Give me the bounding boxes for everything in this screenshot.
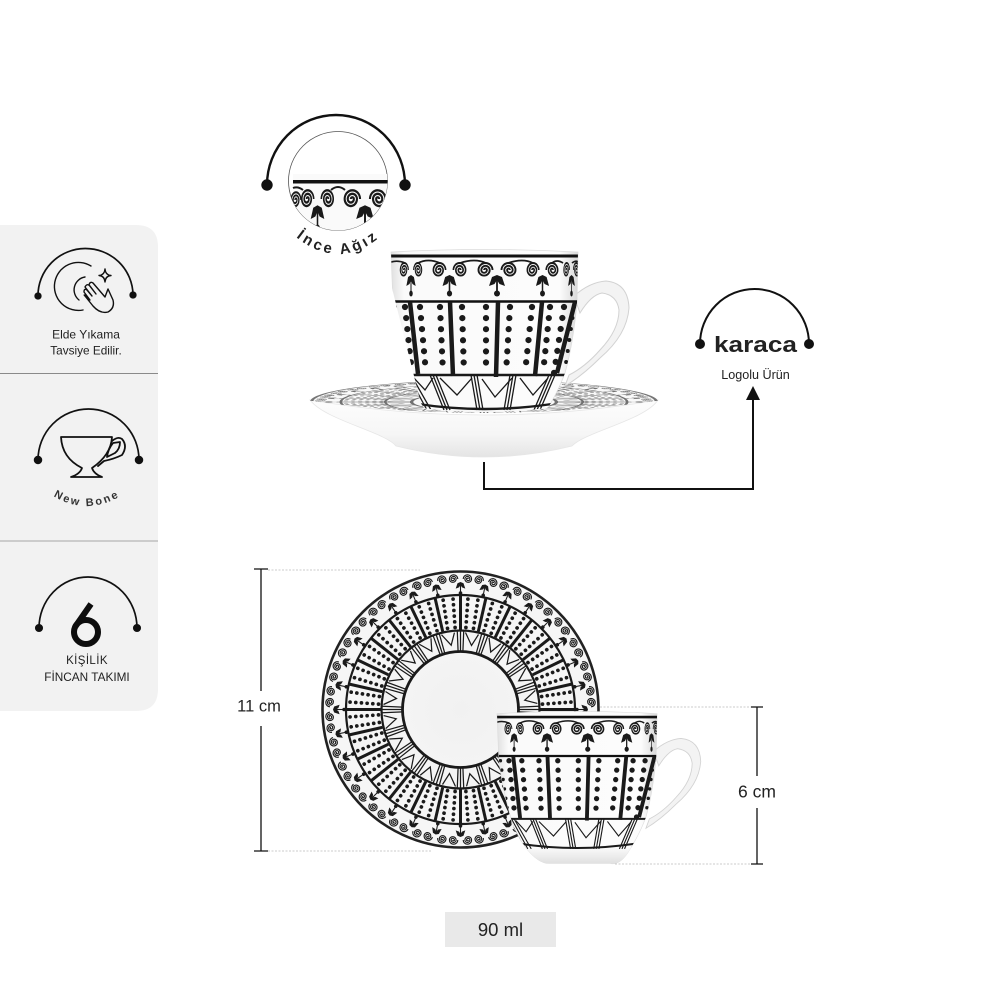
inset circle: cup rim zoomed	[288, 132, 389, 234]
arc with dots	[696, 289, 813, 348]
capacity label: 90 ml	[445, 912, 556, 947]
arc with dots	[262, 115, 410, 190]
arrow: connector from cup to logo	[484, 386, 760, 489]
icon: arc with dots	[36, 577, 140, 631]
callout: logo	[696, 289, 813, 382]
capacity label: 90 ml: 90 ml	[478, 919, 523, 940]
feature: New Bone: New Bone	[54, 490, 118, 506]
icon: washing hand	[54, 262, 113, 312]
text: New Bone curved	[50, 494, 124, 506]
number 6	[74, 604, 98, 644]
icon: arc with dots	[35, 409, 142, 463]
text: hand wash: Elde Yıkama	[52, 328, 120, 342]
brand wordmark: karaca	[714, 332, 798, 357]
icon: cup	[61, 437, 125, 477]
cup with pattern	[391, 250, 629, 430]
label: 11 cm: 11 cm	[237, 698, 281, 716]
sidebar background	[0, 225, 158, 711]
feature: hand wash recommended: Tavsiye Edilir.	[50, 344, 122, 358]
feature: 6 person set: FİNCAN TAKIMI	[44, 670, 130, 684]
saucer rim pattern	[310, 382, 658, 413]
product: cup on the right	[497, 711, 701, 866]
feature: 6 person set	[36, 577, 140, 684]
feature: New Bone	[34, 408, 144, 506]
text: İnce Ağız curved	[284, 226, 392, 254]
panel: left sidebar of features	[0, 225, 158, 711]
feature: hand wash recommended	[35, 248, 136, 358]
saucer body	[310, 400, 658, 457]
product: plate top view	[322, 570, 600, 848]
icon: arc with dots	[35, 248, 136, 299]
product: saucer with cup, side view	[310, 250, 658, 457]
callout: thin rim detail	[261, 114, 411, 254]
callout: thin rim detail: İnce Ağız	[296, 228, 378, 254]
dimension: cup height 6 cm	[600, 707, 776, 864]
caption: Logolu Ürün	[721, 368, 790, 382]
label: 6 cm: 6 cm	[738, 782, 776, 802]
dimension: plate diameter 11 cm	[237, 569, 432, 851]
text: person set: KİŞİLİK	[66, 654, 108, 667]
